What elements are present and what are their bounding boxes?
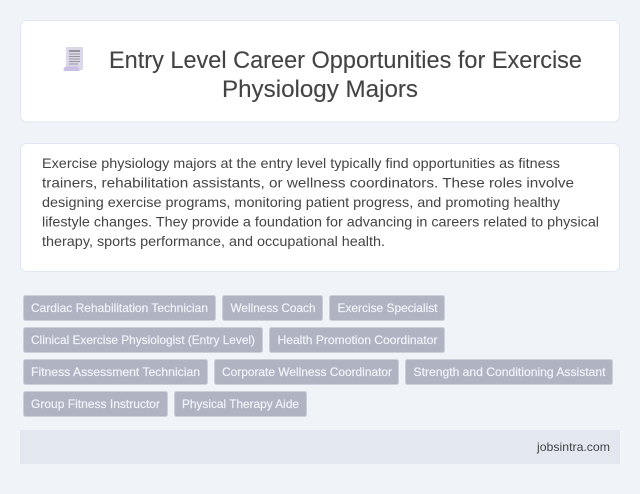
- tag: Wellness Coach: [222, 296, 322, 320]
- text block: description: [42, 155, 599, 249]
- panel: description: [20, 144, 620, 272]
- tag: Exercise Specialist: [330, 296, 444, 320]
- tag: Corporate Wellness Coordinator: Corporate Wellness Coordinator: [222, 365, 392, 379]
- title: Entry Level Career Opportunities for Exercise: [109, 47, 582, 74]
- tag: Group Fitness Instructor: [24, 392, 168, 416]
- tag: Cardiac Rehabilitation Technician: Cardiac Rehabilitation Technician: [31, 301, 208, 315]
- tag: Health Promotion Coordinator: [270, 328, 444, 352]
- text block: description: therapy, sports performance, and occupational health.: [42, 233, 385, 249]
- title: Physiology Majors: [222, 76, 418, 103]
- text block: description: designing exercise programs, monitoring patient progress, and promoting healthy: [42, 194, 560, 210]
- footer text: source: jobsintra.com: [536, 440, 610, 454]
- tag: Clinical Exercise Physiologist: Clinical Exercise Physiologist (Entry Level): [31, 333, 255, 347]
- panel: header: [20, 20, 620, 122]
- tag: Health Promotion Coordinator: Health Promotion Coordinator: [278, 333, 438, 347]
- text block: description: trainers, rehabilitation assistants, or wellness coordinators. These roles involve: [42, 174, 574, 190]
- tag: Clinical Exercise Physiologist: [24, 328, 262, 352]
- tag: Cardiac Rehabilitation Technician: [24, 296, 216, 320]
- tag: Fitness Assessment Technician: Fitness Assessment Technician: [31, 365, 200, 379]
- footer: [20, 430, 620, 464]
- tag: Physical Therapy Aide: Physical Therapy Aide: [182, 397, 299, 411]
- tag: Group Fitness Instructor: Group Fitness Instructor: [31, 397, 160, 411]
- text block: description: Exercise physiology majors at the entry level typically find opportunities as fitness: [42, 155, 560, 171]
- tags: career list: [24, 296, 612, 416]
- tag: Strength and Conditioning Assistant: Strength and Conditioning Assistant: [414, 365, 606, 379]
- tag: Exercise Specialist: Exercise Specialist: [338, 301, 438, 315]
- tag: Wellness Coach: Wellness Coach: [230, 301, 316, 315]
- tag: Physical Therapy Aide: [174, 392, 306, 416]
- tag: Strength and Conditioning Assistant: [406, 360, 612, 384]
- text block: description: lifestyle changes. They provide a foundation for advancing in careers related to physical: [42, 214, 599, 230]
- title: [109, 47, 582, 103]
- icon: document scroll: [64, 47, 83, 71]
- tag: Corporate Wellness Coordinator: [214, 360, 398, 384]
- tag: Fitness Assessment Technician: [24, 360, 208, 384]
